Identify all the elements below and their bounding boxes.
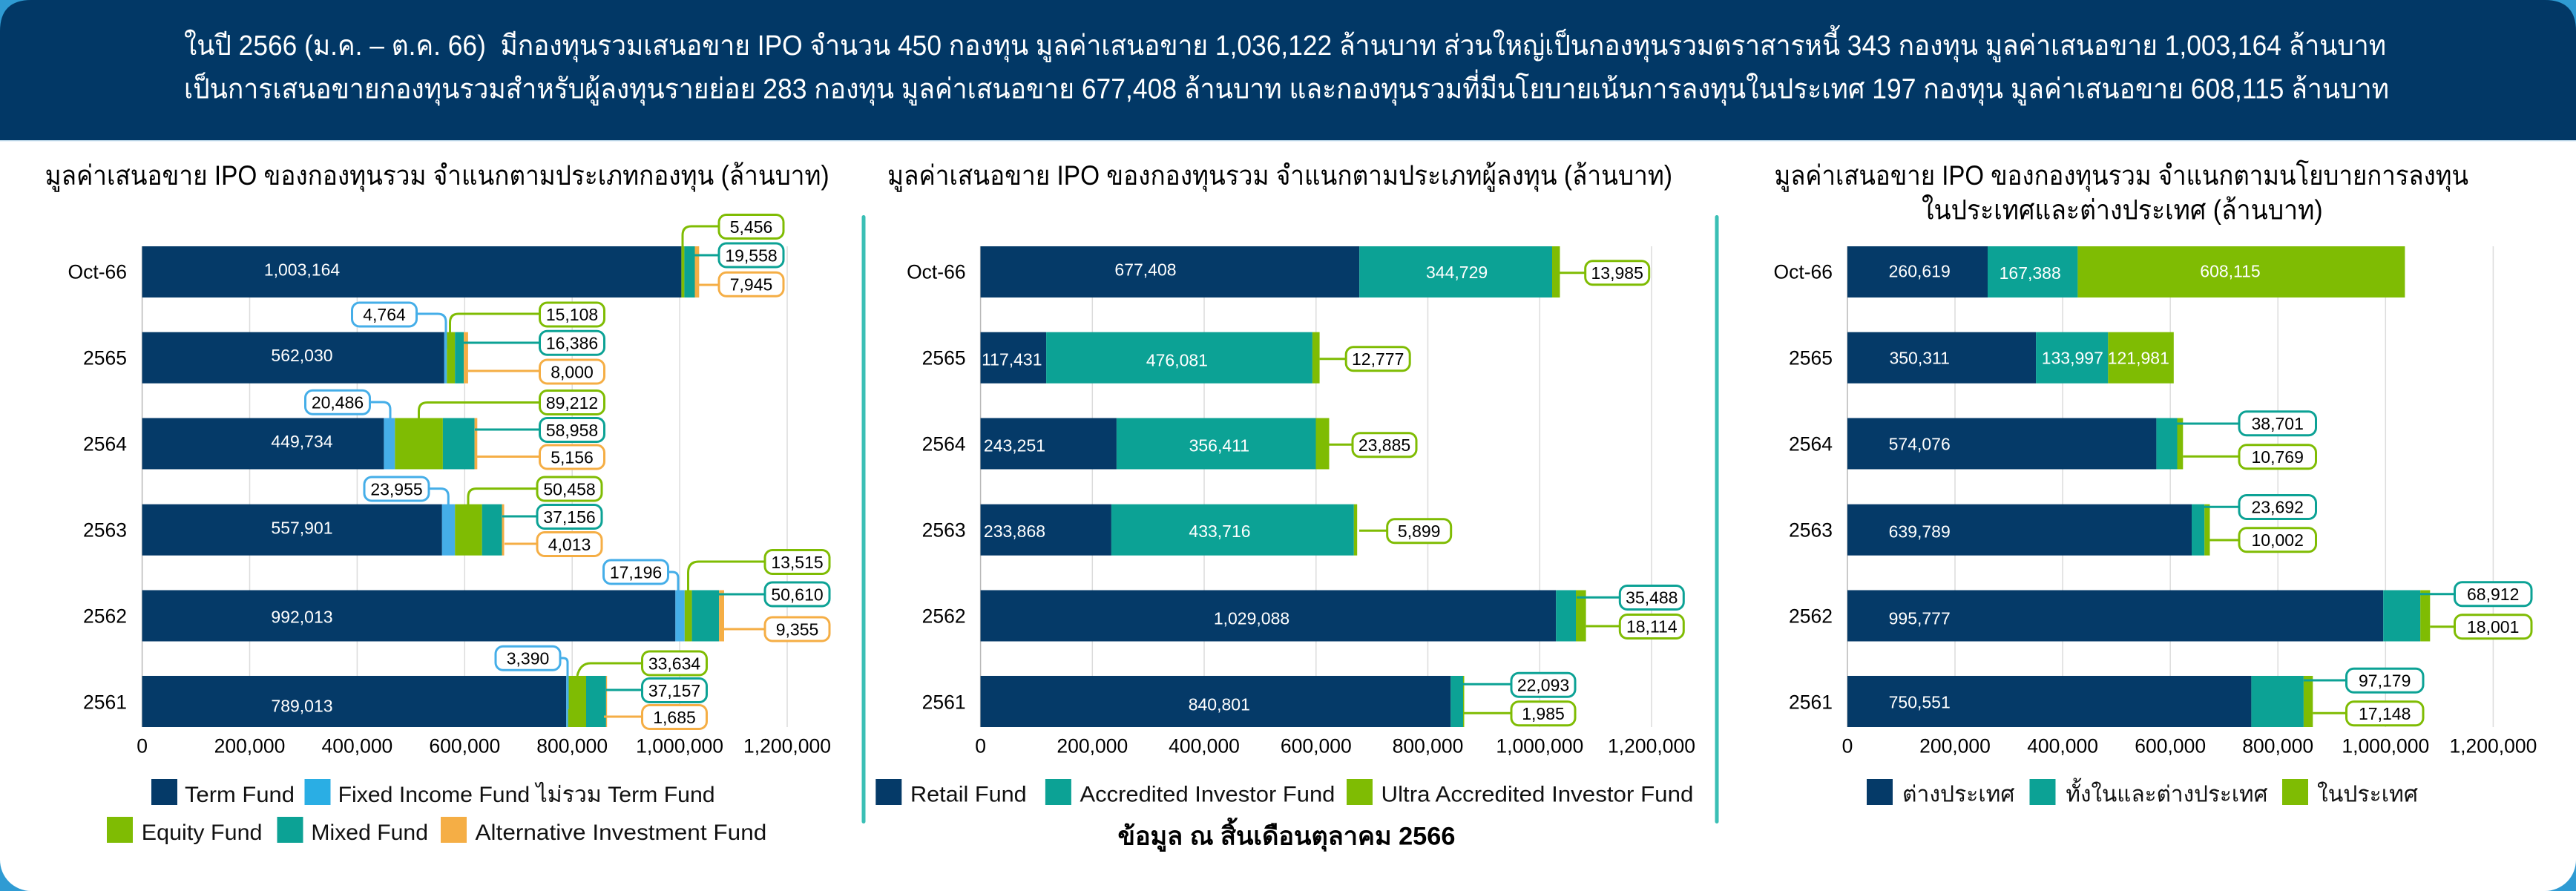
heading: fund type chart: มูลค่าเสนอขาย IPO ของกองทุนรวม จำแนกตามประเภทกองทุน (ล้านบาท) (45, 160, 829, 192)
row: 2563 bar: 557,901 (271, 519, 333, 538)
callouts: 2561: 37,157 (648, 681, 700, 700)
row: 2561 bar: 840,801 (1189, 695, 1250, 714)
row: 2561 bar: 2561 (83, 691, 127, 714)
callout: 23,885 (1330, 433, 1416, 457)
legend: investment policy (1867, 778, 2418, 807)
row: 2564 bar: 2564 (83, 433, 127, 456)
row: 2564 bar: 2564 (922, 433, 966, 456)
row: 2564 bar: 574,076 (1889, 435, 1951, 454)
row: 2563 bar (922, 504, 1357, 556)
x axis labels: policy chart: 0 (1842, 735, 1853, 757)
callouts: 2564: 89,212 (546, 393, 598, 412)
heading: policy chart: มูลค่าเสนอขาย IPO ของกองทุนรวม จำแนกตามนโยบายการลงทุน (1775, 160, 2468, 192)
x axis labels: fund type chart: 800,000 (536, 735, 608, 757)
x axis labels: policy chart: 400,000 (2027, 735, 2098, 757)
heading: investor type chart: มูลค่าเสนอขาย IPO ของกองทุนรวม จำแนกตามประเภทผู้ลงทุน (ล้านบาท) (887, 160, 1672, 192)
header banner (0, 0, 2576, 141)
callouts: 2563: 10,002 (2252, 530, 2304, 550)
x axis labels: policy chart: 200,000 (1919, 735, 1991, 757)
row: Oct-66 bar: Oct-66 (68, 261, 127, 283)
row: 2562 bar (83, 591, 724, 641)
footnote: data date: ข้อมูล ณ สิ้นเดือนตุลาคม 2566 (1117, 817, 1455, 852)
legend: fund type: Mixed Fund (311, 821, 428, 845)
legend: fund type: Equity Fund (142, 821, 263, 845)
x axis labels: fund type chart: 1,200,000 (743, 735, 831, 757)
callouts: 2561 (1463, 673, 1575, 726)
callouts: 2562 (1577, 586, 1683, 638)
x axis labels: investor type chart: 400,000 (1169, 735, 1240, 757)
callouts: 2561: 97,179 (2359, 671, 2411, 690)
row: 2564 bar: 449,734 (271, 432, 333, 451)
x axis labels: investor type chart (975, 735, 1695, 757)
callouts: 2562: 17,196 (610, 562, 662, 582)
row: 2565 bar: 350,311 (1889, 349, 1950, 368)
callouts: 2561: 17,148 (2359, 704, 2411, 723)
callouts: 2564 (2177, 412, 2316, 469)
header banner: ในปี 2566 (ม.ค. – ต.ค. 66) มีกองทุนรวมเสนอขาย IPO จำนวน 450 กองทุน มูลค่าเสนอขาย 1,036,122 ล้านบาท ส่วนใหญ่เป็นกองทุนรวมตราสารหนี้ 343 กองทุน มูลค่าเสนอขาย 1,003,164 ล้านบาท (184, 24, 2386, 62)
callouts: 2562: 13,515 (771, 553, 824, 572)
heading: policy chart: ในประเทศและต่างประเทศ (ล้านบาท) (1922, 194, 2323, 226)
row: Oct-66 bar (907, 246, 1560, 297)
row: Oct-66 bar (68, 246, 699, 297)
callout: 12,777: 12,777 (1352, 349, 1404, 369)
row: 2561 bar: 2561 (1789, 691, 1833, 714)
x axis labels: fund type chart: 200,000 (214, 735, 285, 757)
x axis labels: fund type chart: 1,000,000 (636, 735, 723, 757)
row: 2565 bar: 2565 (922, 347, 966, 369)
row: 2564 bar: 243,251 (984, 435, 1045, 455)
row: 2563 bar: 433,716 (1189, 522, 1251, 541)
x axis labels: fund type chart: 600,000 (429, 735, 500, 757)
row: Oct-66 bar: 677,408 (1114, 260, 1177, 280)
row: 2564 bar (83, 418, 477, 469)
x axis labels: policy chart: 600,000 (2135, 735, 2206, 757)
row: 2561 bar (1789, 676, 2313, 727)
row: 2562 bar: 2562 (922, 605, 966, 628)
callouts: 2562: 35,488 (1626, 588, 1678, 608)
row: Oct-66 bar: 260,619 (1889, 261, 1951, 280)
panel: IPO value by investor type (875, 160, 1695, 852)
panel: IPO value by investment policy (1773, 160, 2537, 807)
callout: 13,985 (1560, 261, 1649, 285)
row: 2563 bar: 2563 (922, 519, 966, 541)
callouts: 2563: 37,156 (543, 507, 596, 527)
callouts: 2561: 1,985 (1522, 704, 1565, 723)
legend: fund type: Fixed Income Fund ไม่รวม Term Fund (338, 781, 715, 807)
row: 2563 bar (1789, 504, 2209, 556)
callouts: 2562: 18,001 (2467, 617, 2519, 637)
row: 2565 bar: 562,030 (271, 346, 333, 365)
panel: IPO value by fund type (45, 160, 831, 845)
callouts: 2565: 16,386 (546, 334, 598, 353)
row: Oct-66 bar (1773, 246, 2405, 297)
row: 2563 bar: 639,789 (1889, 522, 1951, 541)
legend: investor type (875, 779, 1693, 807)
callouts: 2562 (2420, 582, 2531, 639)
callouts: 2563 (2204, 496, 2316, 552)
callouts: 2563: 23,955 (370, 479, 423, 499)
row: Oct-66 bar: Oct-66 (907, 261, 966, 283)
callouts: 2562: 9,355 (776, 619, 818, 639)
row: 2564 bar (1789, 418, 2183, 469)
callouts: 2564 (306, 390, 604, 469)
row: Oct-66 bar: 608,115 (2200, 261, 2261, 280)
callout: 13,985: 13,985 (1591, 263, 1643, 283)
row: 2562 bar: 995,777 (1889, 609, 1951, 628)
x axis labels: investor type chart: 0 (975, 735, 986, 757)
row: 2562 bar: 2562 (83, 605, 127, 628)
row: 2565 bar: 133,997 (2042, 349, 2103, 368)
callouts: 2561: 1,685 (653, 708, 696, 727)
x axis labels: fund type chart: 400,000 (322, 735, 392, 757)
row: Oct-66 bar: Oct-66 (1773, 261, 1833, 283)
row: 2561 bar: 789,013 (271, 696, 333, 715)
x axis labels: investor type chart: 800,000 (1393, 735, 1463, 757)
row: 2563 bar (83, 504, 505, 556)
x axis labels: fund type chart (137, 735, 831, 757)
callouts: 2565: 8,000 (551, 362, 594, 381)
row: Oct-66 bar: 167,388 (2000, 263, 2061, 283)
row: 2561 bar (83, 676, 607, 727)
row: 2565 bar: 121,981 (2108, 349, 2169, 368)
row: 2562 bar (922, 591, 1586, 641)
callouts: 2565: 15,108 (546, 305, 598, 324)
callout: 23,885: 23,885 (1358, 435, 1410, 455)
x axis labels: investor type chart: 600,000 (1281, 735, 1352, 757)
callouts: 2563: 50,458 (543, 479, 596, 499)
row: 2561 bar: 2561 (922, 691, 966, 714)
row: 2565 bar (83, 332, 468, 384)
row: 2565 bar: 117,431 (982, 350, 1042, 369)
row: Oct-66 bar: 344,729 (1426, 263, 1488, 282)
row: 2565 bar (1789, 332, 2174, 384)
callouts: Oct-66: 19,558 (725, 246, 778, 265)
x axis labels: policy chart (1842, 735, 2537, 757)
legend: investor type: Accredited Investor Fund (1080, 783, 1335, 807)
heading: policy chart (1775, 160, 2468, 226)
callouts: 2564: 10,769 (2252, 447, 2304, 467)
callouts: 2564: 58,958 (546, 421, 598, 440)
row: 2564 bar: 2564 (1789, 433, 1833, 456)
callouts: 2561: 22,093 (1517, 675, 1569, 694)
legend: investment policy: ในประเทศ (2317, 782, 2418, 807)
row: Oct-66 bar: 1,003,164 (264, 260, 340, 280)
row: 2563 bar: 233,868 (984, 522, 1045, 541)
callouts: 2563: 23,692 (2252, 498, 2304, 517)
row: 2565 bar (922, 332, 1320, 384)
callouts: 2564: 38,701 (2252, 414, 2304, 433)
callout: 12,777 (1320, 347, 1410, 371)
divider left (862, 215, 865, 823)
row: 2563 bar: 2563 (1789, 519, 1833, 541)
row: 2565 bar: 2565 (83, 347, 127, 369)
callouts: 2562: 18,114 (1626, 617, 1678, 637)
callouts: 2565: 4,764 (363, 305, 406, 324)
callouts: 2562: 68,912 (2467, 585, 2519, 604)
x axis labels: fund type chart: 0 (137, 735, 148, 757)
row: 2563 bar: 2563 (83, 519, 127, 541)
row: 2564 bar: 356,411 (1189, 435, 1249, 455)
row: 2562 bar (1789, 591, 2430, 641)
callouts: 2564: 5,156 (551, 447, 594, 467)
x axis labels: investor type chart: 1,000,000 (1496, 735, 1583, 757)
callouts: 2562: 50,610 (771, 585, 824, 604)
callouts: 2561: 33,634 (648, 654, 700, 673)
legend: investor type: Retail Fund (910, 783, 1027, 807)
x axis labels: policy chart: 1,000,000 (2342, 735, 2429, 757)
callouts: 2563 (364, 477, 602, 556)
row: 2565 bar: 2565 (1789, 347, 1833, 369)
callout: 5,899 (1359, 519, 1451, 543)
legend: fund type (107, 779, 766, 845)
x axis labels: policy chart: 800,000 (2242, 735, 2313, 757)
divider right (1715, 215, 1718, 823)
x axis labels: investor type chart: 200,000 (1057, 735, 1128, 757)
callouts: 2562 (604, 550, 829, 641)
legend: investor type: Ultra Accredited Investor Fund (1381, 783, 1693, 807)
callouts: 2565 (352, 303, 604, 384)
row: 2562 bar: 2562 (1789, 605, 1833, 628)
x axis labels: investor type chart: 1,200,000 (1608, 735, 1695, 757)
callouts: Oct-66: 5,456 (730, 217, 772, 237)
row: 2561 bar (922, 676, 1465, 727)
callout: 5,899: 5,899 (1398, 522, 1440, 541)
legend: fund type: Term Fund (185, 783, 295, 807)
row: 2562 bar: 1,029,088 (1214, 609, 1289, 628)
row: 2561 bar: 750,551 (1889, 692, 1951, 711)
callouts: 2563: 4,013 (548, 535, 591, 554)
row: 2562 bar: 992,013 (271, 608, 333, 627)
callouts: 2561 (2304, 668, 2423, 726)
header banner: เป็นการเสนอขายกองทุนรวมสำหรับผู้ลงทุนรายย่อย 283 กองทุน มูลค่าเสนอขาย 677,408 ล้านบาท และกองทุนรวมที่มีนโยบายเน้นการลงทุนในประเทศ 197 กองทุน มูลค่าเสนอขาย 608,115 ล้านบาท (184, 70, 2389, 105)
legend: investment policy: ต่างประเทศ (1902, 783, 2015, 807)
x axis labels: policy chart: 1,200,000 (2449, 735, 2537, 757)
callouts: 2561 (496, 646, 706, 729)
legend: investment policy: ทั้งในและต่างประเทศ (2066, 778, 2267, 807)
callouts: 2561: 3,390 (507, 649, 549, 668)
callouts: Oct-66: 7,945 (730, 275, 772, 295)
row: 2565 bar: 476,081 (1146, 350, 1208, 369)
row: 2564 bar (922, 418, 1330, 469)
callouts: 2564: 20,486 (312, 393, 364, 412)
legend: fund type: Alternative Investment Fund (475, 821, 766, 845)
callouts: Oct-66 (683, 215, 783, 296)
